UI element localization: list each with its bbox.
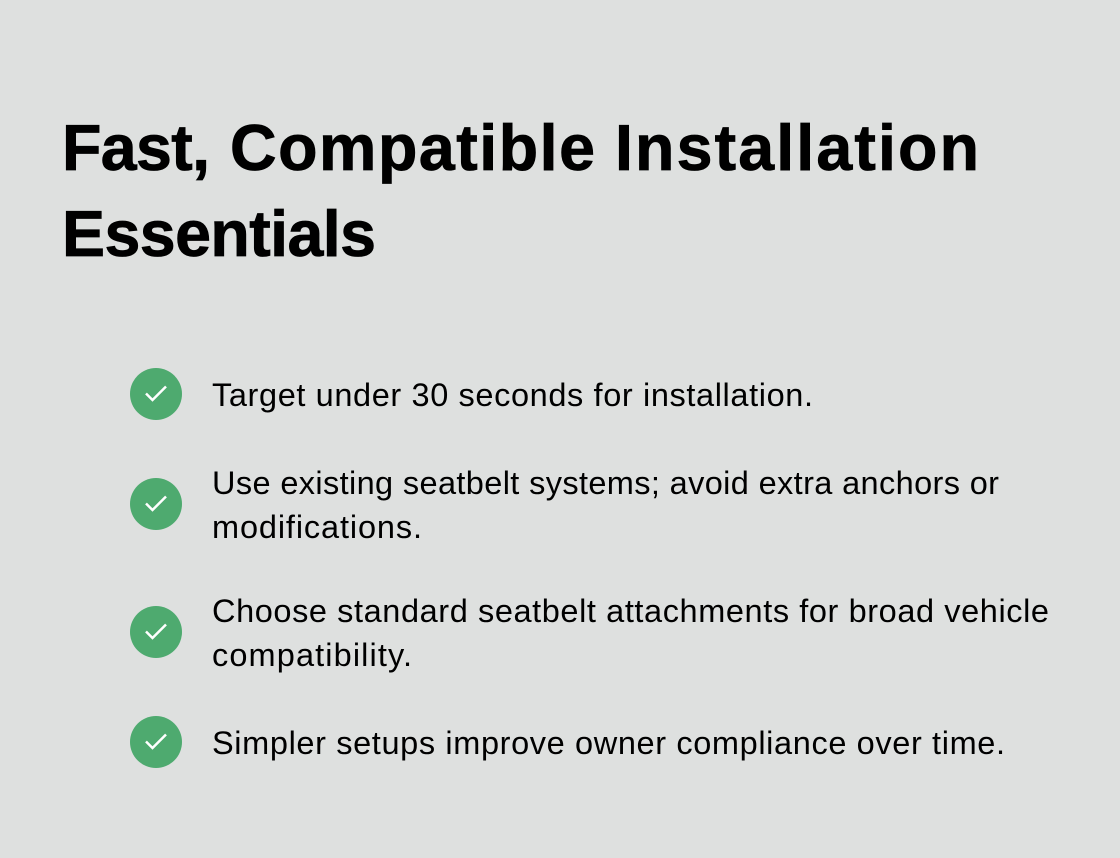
item 2 text: Use existing seatbelt systems; avoid extra anchors or [212,465,999,501]
item 1 text: Target under 30 seconds for installation. [212,377,813,413]
item 1 [130,368,813,420]
item 2 text: modifications. [212,509,422,545]
title [62,112,979,270]
item 3 text: Choose standard seatbelt attachments for broad vehicle [212,593,1049,629]
item 3 [130,593,1049,673]
item 2 text [212,465,999,545]
title: Compatible [230,112,595,184]
item 4 [130,716,1005,768]
icon: green check 2 [130,478,182,530]
icon: green check 4 [130,716,182,768]
item 3 text: compatibility. [212,637,412,673]
item 2 [130,465,999,545]
icon: green check 1 [130,368,182,420]
checklist [130,368,1049,768]
title: Fast, [62,112,210,184]
title: Essentials [62,198,376,270]
item 3 text [212,593,1049,673]
icon: green check 3 [130,606,182,658]
title: Installation [615,112,979,184]
item 4 text: Simpler setups improve owner compliance over time. [212,725,1005,761]
